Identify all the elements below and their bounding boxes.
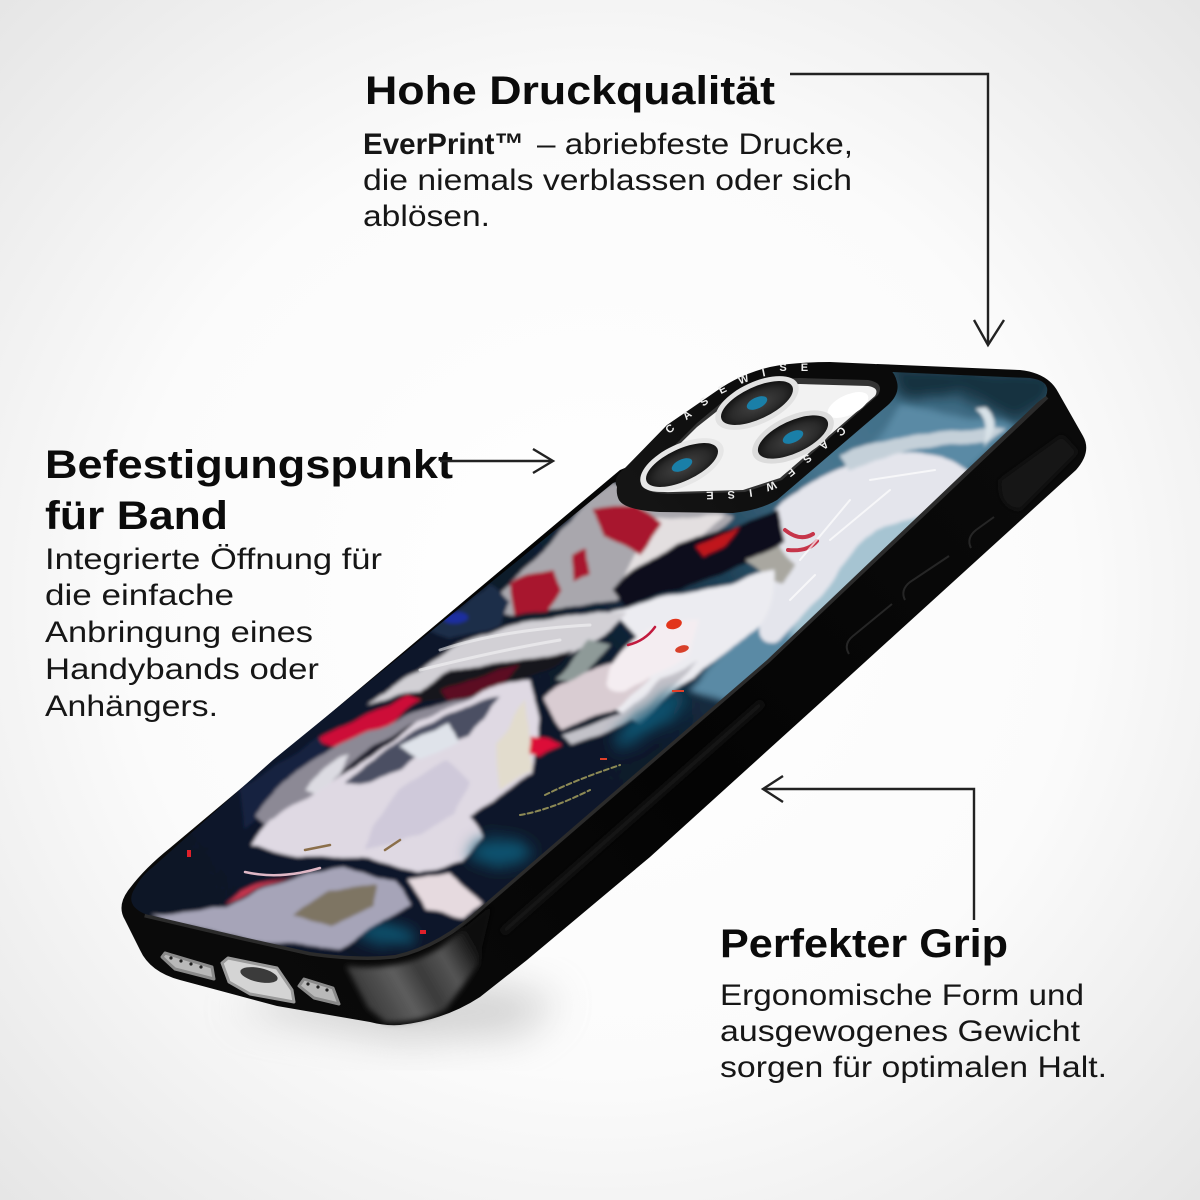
spark: [420, 930, 426, 934]
volume button lower: [847, 604, 892, 654]
brand text ring: [666, 364, 846, 500]
body text: die niemals verblassen oder sich: [363, 164, 852, 197]
port surround: [222, 958, 294, 1002]
body text: Anbringung eines: [45, 616, 313, 649]
pink tail: [245, 868, 320, 875]
face: [606, 635, 650, 693]
art base: [131, 372, 1048, 956]
heading: für Band: [45, 494, 228, 538]
dress gold: [495, 700, 533, 790]
body text: Integrierte Öffnung für: [45, 543, 382, 576]
charging port: [222, 958, 294, 1002]
dark hair gap: [405, 650, 575, 705]
body text: – abriebfeste Drucke,: [537, 128, 853, 161]
grey hair streaks: [420, 625, 590, 670]
spark left: [187, 850, 191, 857]
swirl white: [305, 755, 350, 795]
lens top: [707, 365, 807, 441]
under hair red: [530, 735, 560, 755]
bumper highlight: [500, 700, 765, 935]
head hair: [610, 570, 777, 725]
hair wisps right: [560, 660, 700, 745]
skirt dark trim: [225, 875, 300, 905]
skirt: [150, 868, 410, 950]
eye left: [674, 644, 690, 654]
heading: Perfekter Grip: [720, 922, 1008, 966]
bumper rim: [145, 396, 1046, 956]
wrist gold: [305, 840, 400, 850]
volume button upper: [903, 556, 949, 600]
arrow: strap attachment: [440, 449, 553, 473]
neck ornament: [555, 640, 610, 680]
body text: Ergonomische Form und: [720, 979, 1084, 1012]
ring bevel: [640, 378, 880, 494]
dark red hair gap: [440, 665, 520, 702]
heading: Hohe Druckqualität: [365, 69, 775, 113]
body text: [363, 128, 853, 233]
hair swirl: [252, 692, 473, 826]
body text: Handybands oder: [45, 653, 319, 686]
eye right: [665, 617, 683, 631]
body text: Anhängers.: [45, 690, 218, 723]
dark crown: [612, 510, 785, 605]
dress dark ornament: [345, 697, 500, 785]
heading: [45, 443, 453, 538]
hat: [485, 483, 735, 615]
crown red: [697, 525, 740, 558]
brand text ring: CASEWISE: [706, 428, 846, 500]
blue spot: [445, 611, 469, 623]
callout: grip: [720, 922, 1107, 1084]
speaker dots: [169, 956, 329, 992]
printed artwork: [131, 372, 1048, 956]
mute switch: [969, 517, 994, 548]
lens right: [744, 399, 842, 475]
fine detail strokes: [245, 470, 935, 875]
arrow: grip: [763, 776, 974, 920]
island ring: [616, 362, 898, 513]
spark upper: [672, 690, 684, 692]
leg: [407, 872, 483, 918]
pale blue sky: [690, 405, 1015, 705]
white hair streaks: [790, 470, 935, 600]
spark mid: [600, 758, 607, 760]
brand text ring: CASEWISE: [666, 364, 808, 432]
phone shadow: [230, 985, 560, 1042]
torso: [250, 680, 540, 873]
glossy corner: [346, 905, 492, 1022]
speaker left: [162, 953, 214, 979]
lower swirl dark: [340, 722, 414, 776]
hat highlight: [620, 515, 725, 585]
chest shadow: [365, 760, 470, 850]
eyes and sparks: [187, 617, 690, 934]
pale blue highlights: [786, 516, 918, 640]
camera plate: [641, 384, 876, 492]
blue reflections: [355, 685, 693, 945]
white hair: [758, 454, 975, 641]
red hat patches: [510, 505, 662, 615]
tiara: [745, 545, 795, 585]
hair streak: [840, 429, 1005, 470]
speaker right: [299, 979, 339, 1004]
ornament white: [400, 722, 460, 760]
flash: [824, 387, 872, 423]
lens left: [632, 427, 732, 503]
phone case: [122, 362, 1086, 1026]
body text: ausgewogenes Gewicht: [720, 1015, 1081, 1048]
body text: ablösen.: [363, 200, 490, 233]
callout: strap attachment: [45, 443, 453, 723]
body text: [720, 979, 1107, 1084]
body text: [45, 543, 382, 723]
dark top corner: [892, 372, 1048, 426]
under hair: [545, 660, 650, 730]
heading: Befestigungspunkt: [45, 443, 453, 487]
body text: die einfache: [45, 579, 234, 612]
face markings: [628, 627, 655, 645]
red hair area: [318, 695, 420, 748]
gold sparkles: [520, 765, 620, 815]
callout: print quality: [363, 69, 853, 233]
port hole: [239, 964, 279, 986]
navy corner: [240, 735, 330, 830]
arrow: print quality: [790, 74, 1004, 345]
red ribbon: [785, 530, 817, 550]
camera island: [616, 362, 898, 513]
side notch: [1000, 435, 1078, 510]
long hair: [365, 610, 625, 705]
body text: EverPrint™: [363, 128, 524, 161]
side buttons: [847, 517, 994, 654]
case body: [121, 364, 1086, 1025]
crescent: [975, 408, 994, 447]
body text: sorgen für optimalen Halt.: [720, 1051, 1107, 1084]
left streak area: [430, 585, 510, 640]
gold dress pattern: [293, 883, 377, 925]
